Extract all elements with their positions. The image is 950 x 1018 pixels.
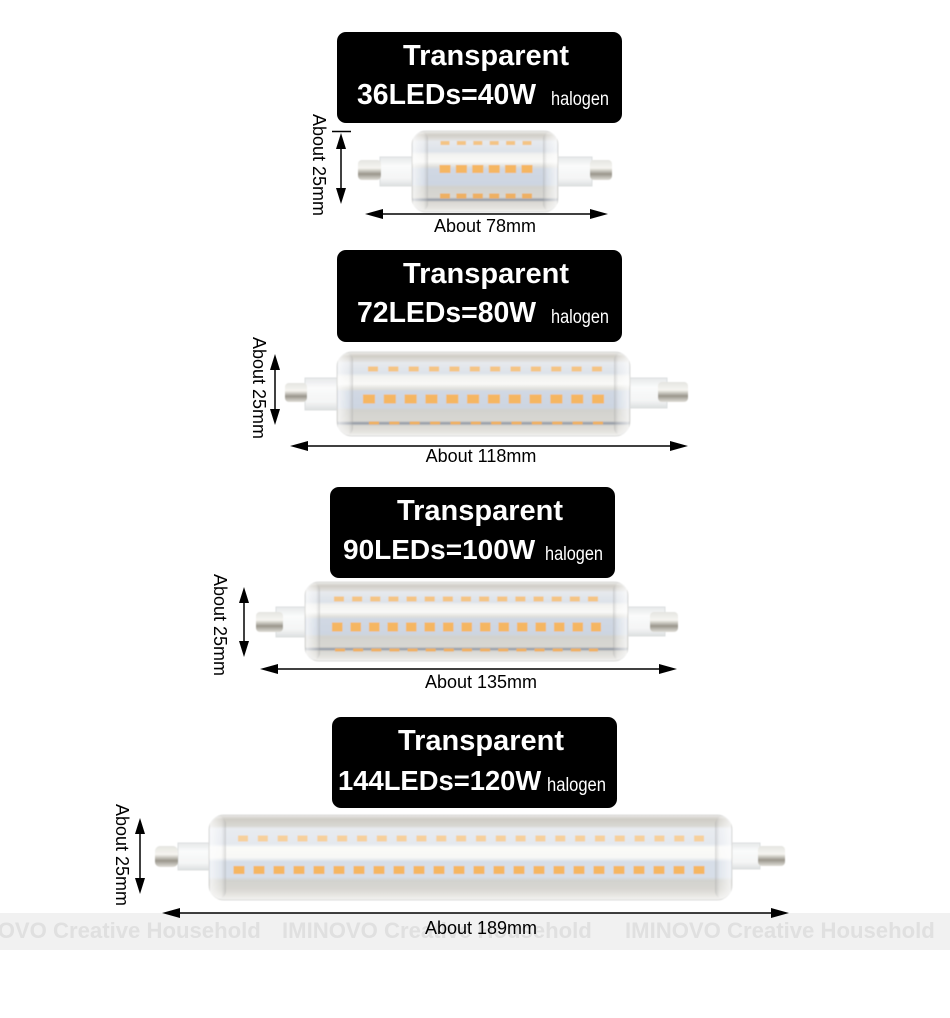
label: About 118mm: About 118mm xyxy=(426,446,536,466)
arrow: 118mm length xyxy=(290,441,688,451)
arrow: 189mm length xyxy=(162,908,789,918)
label: About 135mm: About 135mm xyxy=(425,672,537,692)
label: About 25mm: About 25mm xyxy=(309,114,329,216)
label box: 90LEDs xyxy=(330,487,615,578)
label box: 72LEDs: halogen xyxy=(551,307,609,328)
label box: 144LEDs: 144LEDs=120W xyxy=(338,765,541,796)
label box: 36LEDs xyxy=(337,32,622,123)
label box: 72LEDs xyxy=(337,250,622,342)
label box: 72LEDs: Transparent xyxy=(403,258,569,290)
photo: 90 LED bulb xyxy=(256,582,678,661)
panel: 72 LED bulb xyxy=(249,250,688,466)
label box: 72LEDs: 72LEDs=80W xyxy=(357,297,536,329)
label box: 90LEDs: Transparent xyxy=(397,495,563,527)
panel: 36 LED bulb xyxy=(309,32,622,236)
watermark band: IMINOVO Creative Household xyxy=(282,918,592,943)
label box: 144LEDs xyxy=(332,717,617,808)
arrow: 25mm height xyxy=(135,818,145,894)
arrow: 25mm height xyxy=(270,354,280,425)
photo: 36 LED bulb xyxy=(358,131,612,212)
arrow: 25mm height xyxy=(332,132,351,204)
photo: 72 LED bulb xyxy=(285,352,688,436)
label box: 36LEDs: 36LEDs=40W xyxy=(357,79,536,111)
label box: 90LEDs: halogen xyxy=(545,544,603,565)
label box: 90LEDs: 90LEDs=100W xyxy=(343,534,536,565)
label: About 25mm: About 25mm xyxy=(112,804,132,906)
label box: 36LEDs: halogen xyxy=(551,89,609,110)
label box: 144LEDs: halogen xyxy=(547,775,606,796)
arrow: 25mm height xyxy=(239,587,249,657)
label: About 25mm: About 25mm xyxy=(210,574,230,676)
arrow: 78mm length xyxy=(365,209,608,219)
watermark band xyxy=(0,913,950,950)
arrow: 135mm length xyxy=(260,664,677,674)
watermark band: IMINOVO Creative Household xyxy=(625,918,935,943)
label box: 36LEDs: Transparent xyxy=(403,40,569,72)
photo: 144 LED bulb xyxy=(155,815,785,900)
label: About 78mm: About 78mm xyxy=(434,216,536,236)
label box: 144LEDs: Transparent xyxy=(398,725,564,757)
label: About 25mm: About 25mm xyxy=(249,337,269,439)
panel: 144 LED bulb xyxy=(112,717,789,938)
label: About 189mm: About 189mm xyxy=(425,918,537,938)
panel: 90 LED bulb xyxy=(210,487,678,692)
